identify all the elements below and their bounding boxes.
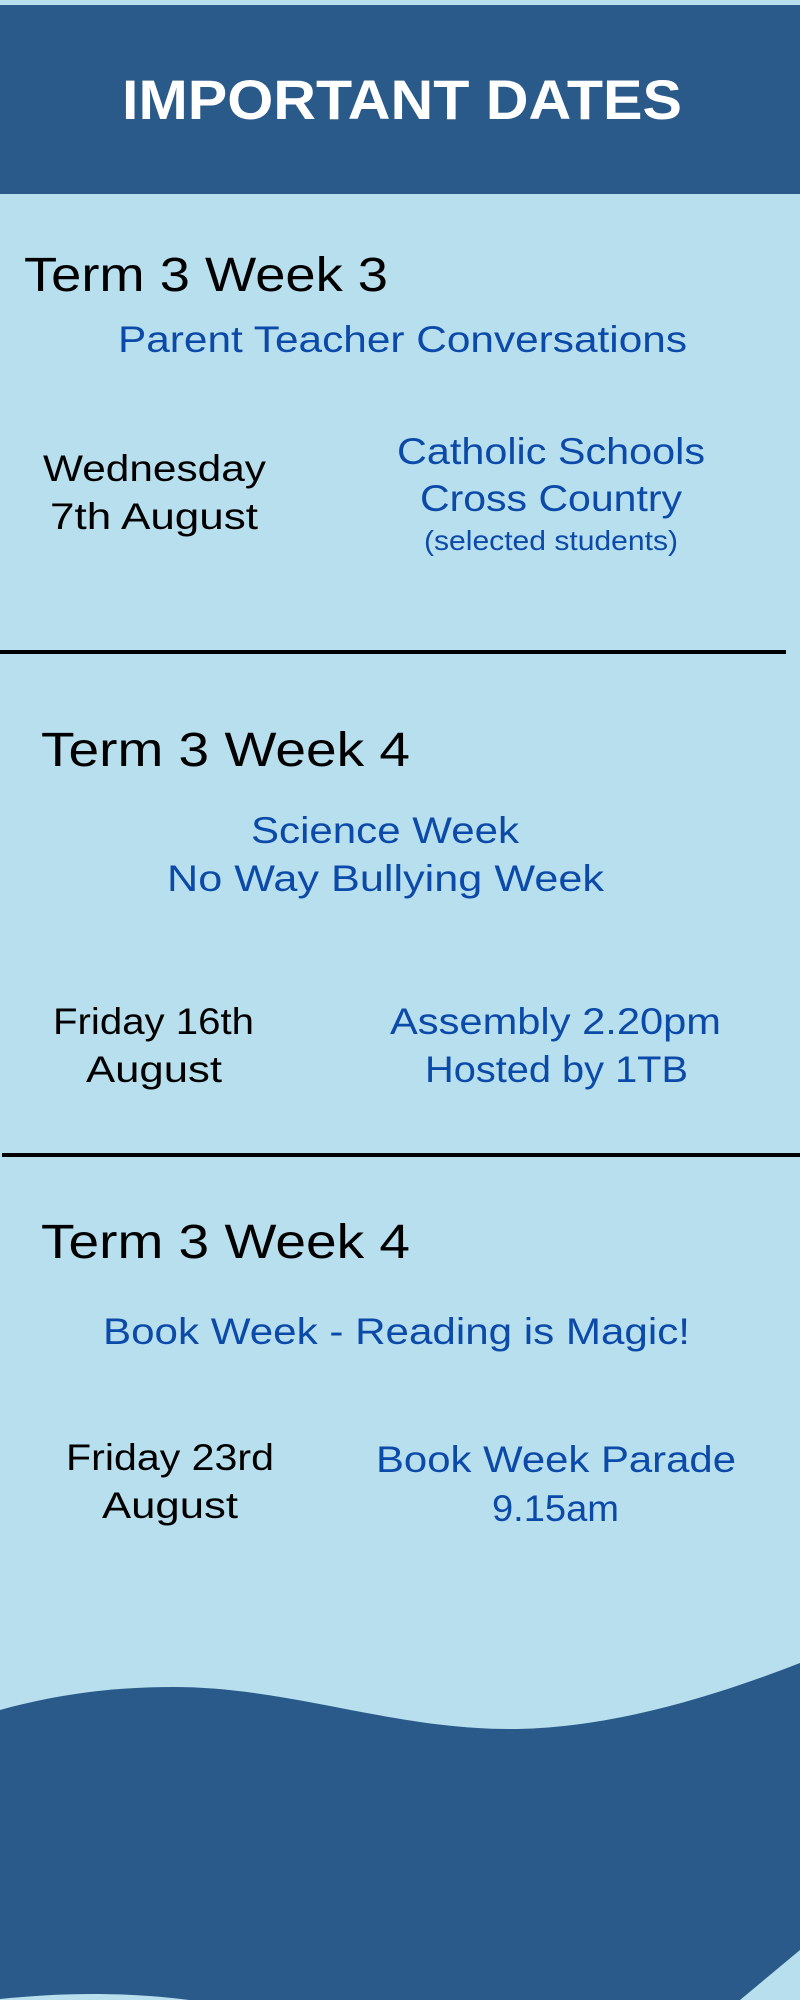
footer wave: [0, 1663, 800, 2000]
date: friday 16th august: August: [86, 1049, 223, 1090]
event: book week parade: 9.15am: [492, 1488, 619, 1529]
event: book week parade: Book Week Parade: [376, 1439, 736, 1480]
event: book week parade: [376, 1439, 736, 1529]
event: catholic schools cross country: [397, 431, 705, 556]
date: wednesday 7th august: 7th August: [50, 496, 259, 537]
heading: term 3 week 3: Term 3 Week 3: [24, 249, 388, 302]
date: friday 16th august: [53, 1001, 254, 1090]
heading: term 3 week 4: Term 3 Week 4: [41, 1216, 410, 1269]
panel: term 3 week 4 science week: [41, 724, 721, 1090]
event: science week and no way bullying week: [167, 810, 605, 899]
date: friday 16th august: Friday 16th: [53, 1001, 254, 1042]
event: catholic schools cross country: Catholic Schools: [397, 431, 705, 472]
event: assembly: Assembly 2.20pm: [390, 1001, 721, 1042]
title: IMPORTANT DATES: [122, 68, 682, 131]
event: parent teacher conversations: Parent Teacher Conversations: [118, 319, 687, 360]
event: catholic schools cross country: (selected students): [424, 525, 678, 556]
event: science week and no way bullying week: No Way Bullying Week: [167, 858, 605, 899]
date: friday 23rd august: Friday 23rd: [66, 1437, 274, 1478]
event: book week: Book Week - Reading is Magic!: [103, 1311, 690, 1352]
heading: term 3 week 4: Term 3 Week 4: [41, 724, 410, 777]
panel: term 3 week 3: [24, 249, 705, 556]
date: wednesday 7th august: [43, 448, 267, 537]
event: catholic schools cross country: Cross Country: [420, 478, 683, 519]
date: friday 23rd august: [66, 1437, 274, 1526]
header banner: [0, 5, 800, 194]
date: friday 23rd august: August: [102, 1485, 239, 1526]
event: assembly: Hosted by 1TB: [425, 1049, 688, 1090]
panel: term 3 week 4 book week: [41, 1216, 736, 1529]
date: wednesday 7th august: Wednesday: [43, 448, 267, 489]
event: science week and no way bullying week: Science Week: [251, 810, 520, 851]
event: assembly: [390, 1001, 721, 1090]
